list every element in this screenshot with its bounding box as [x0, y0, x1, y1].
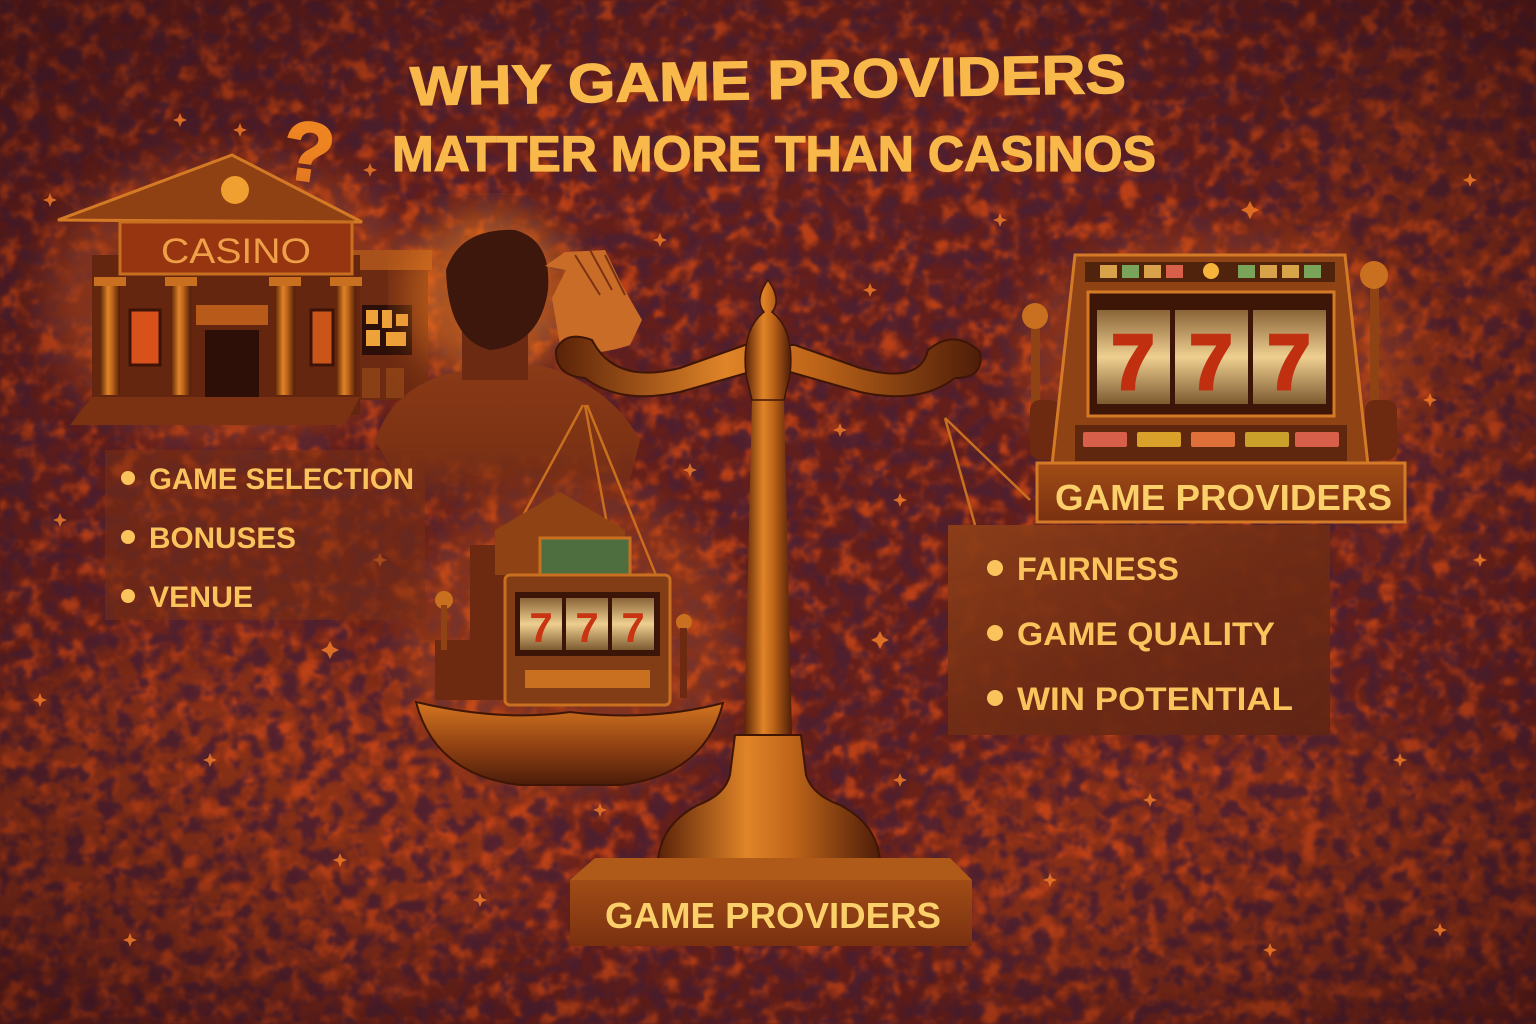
machine levers — [1022, 261, 1397, 460]
bullet list — [987, 551, 1293, 717]
icon: question mark: ? — [276, 102, 340, 202]
scale pan bowl — [416, 702, 723, 785]
small slot machine in pan: 7 — [621, 604, 645, 651]
panel: casino features — [105, 450, 425, 620]
bullet list: WIN POTENTIAL — [1017, 681, 1293, 717]
small slot machine in pan: 7 — [575, 604, 599, 651]
plinth: game providers — [570, 858, 972, 946]
casino sign: CASINO — [161, 232, 311, 271]
panel: provider features — [948, 525, 1330, 735]
reels: 7 — [1189, 318, 1233, 406]
balance scale — [480, 280, 1030, 862]
bullet list: GAME QUALITY — [1017, 616, 1275, 652]
title: WHY GAME PROVIDERS — [410, 43, 1126, 117]
reels: 7 — [1267, 318, 1311, 406]
person scratching head — [375, 210, 642, 520]
scale arm — [556, 337, 981, 396]
plinth: game providers: GAME PROVIDERS — [605, 895, 941, 936]
left chains — [480, 405, 662, 595]
title: MATTER MORE THAN CASINOS — [392, 126, 1156, 182]
slot machine — [1015, 230, 1415, 490]
reels: 7 — [1111, 318, 1155, 406]
scale finial — [745, 280, 791, 400]
reels — [1097, 310, 1326, 406]
casino sign — [120, 222, 352, 274]
small slot machine in pan: 7 — [529, 604, 553, 651]
scale column — [744, 400, 792, 735]
label: game providers top right: GAME PROVIDERS — [1055, 477, 1392, 518]
bullet list: FAIRNESS — [1017, 551, 1179, 587]
small slot machine in pan — [400, 490, 740, 790]
title — [392, 43, 1156, 182]
bullet list: GAME SELECTION — [149, 463, 414, 496]
bullet list: VENUE — [149, 581, 253, 614]
bullet list — [121, 463, 414, 614]
label: game providers top right — [1037, 463, 1405, 522]
scale base — [658, 735, 880, 862]
bullet list: BONUSES — [149, 522, 296, 555]
right chains — [945, 418, 1030, 525]
casino building — [45, 155, 432, 440]
